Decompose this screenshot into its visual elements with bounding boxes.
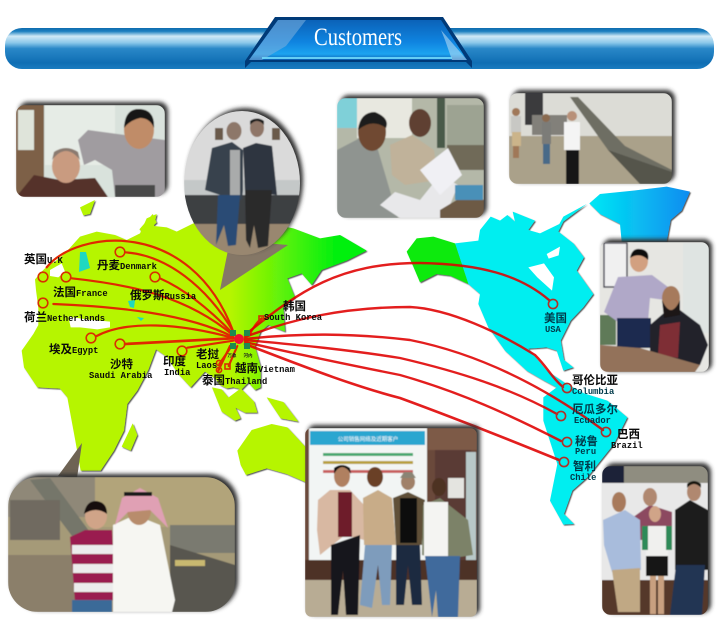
country labels: Americas: Peru <box>575 447 596 457</box>
hub markers <box>228 330 253 359</box>
hub markers: 河内 <box>244 352 253 359</box>
country labels: Europe and Asia: 越南Vietnam <box>235 361 295 375</box>
photo: two men reading documents <box>337 95 487 218</box>
photo: two men in factory speech bubble <box>8 443 238 612</box>
lakes <box>79 252 144 321</box>
country labels: Europe and Asia: 丹麦Denmark <box>97 258 158 272</box>
country labels: Americas: Columbia <box>572 387 615 397</box>
banner bar <box>5 28 714 69</box>
country labels: Europe and Asia: 印度 <box>163 354 186 368</box>
country labels: Americas: USA <box>545 325 562 335</box>
country labels: Americas: Ecuador <box>574 416 611 426</box>
country labels: Americas <box>544 311 643 483</box>
country labels: Americas: Brazil <box>611 441 643 451</box>
photo: woman in factory with conveyor <box>509 90 675 184</box>
country labels: Americas: 巴西 <box>617 428 640 441</box>
country labels: Europe and Asia: 法国France <box>53 285 108 299</box>
country labels: Europe and Asia: South Korea <box>264 313 323 323</box>
country labels: Europe and Asia: 韩国 <box>283 299 306 313</box>
banner centre plate <box>245 17 472 68</box>
photo: oval portrait speech bubble <box>184 108 303 290</box>
country labels: Americas: 美国 <box>544 311 567 325</box>
routes to Europe, Middle East, Asia <box>47 241 262 371</box>
photo: four men in front of customer board <box>305 425 480 617</box>
country labels: Europe and Asia: 沙特 <box>110 357 133 371</box>
country labels: Europe and Asia: India <box>164 368 191 378</box>
country labels: Americas: 哥伦比亚 <box>572 373 618 387</box>
photo: four people group <box>602 463 711 615</box>
country labels: Europe and Asia <box>24 252 323 387</box>
country labels: Europe and Asia: 英国U.K <box>24 252 64 266</box>
country labels: Europe and Asia: Laos <box>196 361 217 371</box>
Greenland <box>589 187 690 242</box>
country labels: Europe and Asia: Saudi Arabia <box>89 371 153 381</box>
routes to the Americas <box>245 263 603 460</box>
world map: Europe, Asia, Africa, Australia <box>22 200 367 483</box>
country labels: Europe and Asia: 俄罗斯Russia <box>130 288 197 302</box>
country labels: Europe and Asia: 荷兰Netherlands <box>24 310 105 324</box>
city markers <box>38 247 611 467</box>
hub markers: 万象 <box>228 352 237 359</box>
world map: the Americas <box>407 187 690 525</box>
country labels: Americas: 厄瓜多尔 <box>572 402 618 416</box>
country labels: Americas: 秘鲁 <box>575 434 598 448</box>
photo: two men in office <box>16 102 168 197</box>
country labels: Americas: 智利 <box>573 459 596 473</box>
country labels: Europe and Asia: 埃及Egypt <box>49 342 98 356</box>
route lines <box>47 241 603 460</box>
photo: two men at table <box>600 239 712 372</box>
country labels: Americas: Chile <box>570 473 596 483</box>
title banner <box>5 17 714 69</box>
photo: four men in front of customer board: 公司销售网络及近期客户 <box>338 435 398 443</box>
heading: Customers: Customers <box>314 24 402 51</box>
country labels: Europe and Asia: 泰国Thailand <box>202 373 267 387</box>
country labels: Europe and Asia: 老挝 <box>196 347 219 361</box>
